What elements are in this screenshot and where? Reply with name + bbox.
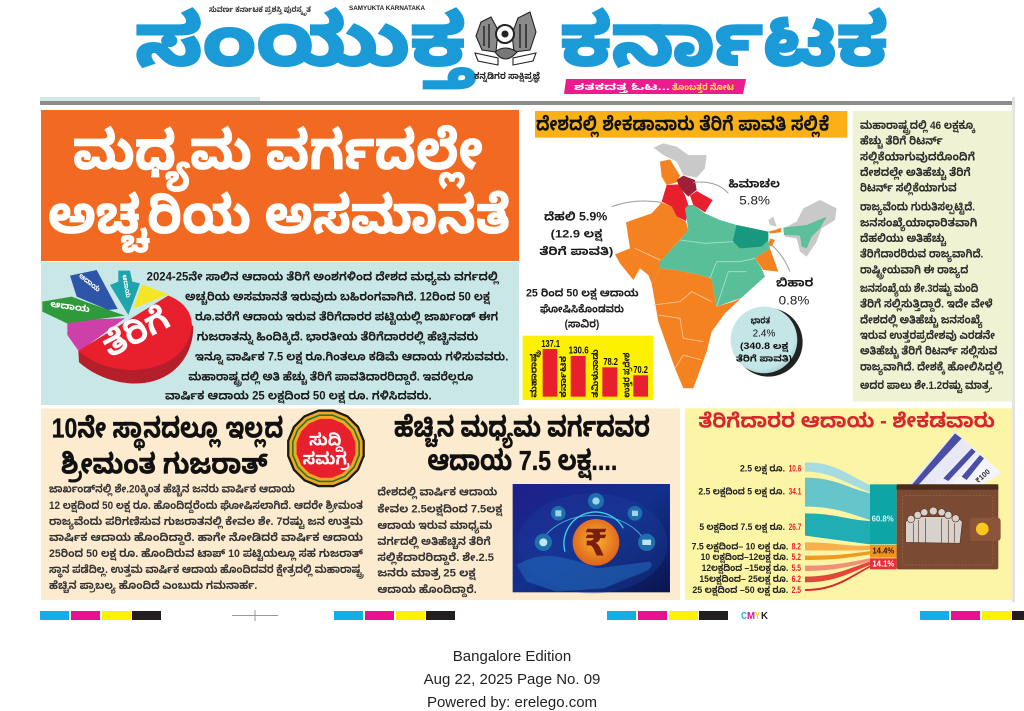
panel: taxpayer income percentages <box>685 408 1012 600</box>
registration colour bars <box>40 610 1024 622</box>
panel: Maharashtra text: ದೇಶದಲ್ಲಿ ಅತಿಹೆಚ್ಚು ಜನಸಂಖ್ಯೆ <box>860 313 983 328</box>
image: rupee coin on hand <box>513 484 670 593</box>
callout: India circle: (340.8 ಲಕ್ಷ <box>740 341 789 353</box>
badge: Suddi Samagra: ಸುದ್ದಿ <box>309 430 344 453</box>
panel: intro <box>41 262 519 405</box>
callout: Bihar: ಬಿಹಾರ <box>776 277 813 290</box>
income labels: 5 ಲಕ್ಷದಿಂದ 7.5 ಲಕ್ಷ ರೂ. <box>699 522 785 534</box>
sankey flows <box>805 462 897 591</box>
intro text: ರೂ.ವರೆಗೆ ಆದಾಯ ಇರುವ ತೆರಿಗೆದಾರರ ಪಟ್ಟಿಯಲ್ಲಿ ಜಾರ್ಖಂಡ್ ಈಗ <box>195 311 498 326</box>
bar chart: ತಮಿಳುನಾಡು <box>590 349 600 398</box>
pink tag: ತೊಂಬತ್ತರ ನೋಟ <box>672 82 734 93</box>
callout: Delhi <box>539 201 662 258</box>
Gujarat body text: ರಾಜ್ಯವೆಂದು ಪರಿಗಣಿಸುವ ಗುಜರಾತನಲ್ಲಿ ಕೇವಲ ಶೇ. 7ರಷ್ಟು ಜನ ಉತ್ತಮ <box>49 516 363 530</box>
story body text: ವರ್ಗದಲ್ಲಿ ಅತಿಹೆಚ್ಚಿನ ತೆರಿಗೆ <box>377 536 491 550</box>
bar chart caption: 25 ರಿಂದ 50 ಲಕ್ಷ ಆದಾಯ <box>526 288 639 301</box>
Gujarat heading <box>52 413 283 482</box>
panel: tax filing map <box>523 111 847 400</box>
icon: wallet with banknotes: ₹100 <box>974 467 992 485</box>
story body text: ಆದಾಯ ಹೊಂದಿದ್ದಾರೆ. <box>377 584 477 598</box>
income labels: 2.5 ಲಕ್ಷದಿಂದ 5 ಲಕ್ಷ ರೂ. <box>698 486 785 498</box>
income labels: 34.1 <box>789 486 801 496</box>
masthead title left: ಸಂಯುಕ್ತ <box>135 1 476 89</box>
story body text: ಕೇವಲ 2.5ಲಕ್ಷದಿಂದ 7.5ಲಕ್ಷ <box>377 503 502 517</box>
map of India <box>615 143 837 388</box>
panel: Maharashtra text: ಜನಸಂಖ್ಯೆಯ ಶೇ.3ರಷ್ಟು ಮಂದಿ <box>860 282 978 297</box>
masthead title right: ಕರ್ನಾಟಕ <box>560 1 888 81</box>
story body text: ದೇಶದಲ್ಲಿ ವಾರ್ಷಿಕ ಆದಾಯ <box>377 486 497 500</box>
sankey flows: 14.1% <box>872 558 895 568</box>
footer text: Aug 22, 2025 Page No. 09 <box>424 671 600 688</box>
callout: Himachal <box>693 178 780 207</box>
Gujarat body text: ವಾರ್ಷಿಕ ಆದಾಯ ಹೊಂದಿದ್ದಾರೆ. ಹಾಗೇ ನೋಡಿದರೆ ವಾರ್ಷಿಕ ಆದಾಯ <box>49 532 363 546</box>
income labels <box>692 463 801 597</box>
bar chart: 137.1 <box>541 339 560 350</box>
story body text: ಜನರು ಮಾತ್ರ 25 ಲಕ್ಷ <box>377 568 476 582</box>
bar chart: ಕರ್ನಾಟಕ <box>558 355 568 398</box>
panel: Maharashtra text: ದೆಹಲಿಯು ಅತಿಹೆಚ್ಚು <box>860 232 947 247</box>
panel: Maharashtra text: ಮಹಾರಾಷ್ಟ್ರದಲ್ಲಿ 46 ಲಕ್ಷಕ್ಕೂ <box>860 120 976 135</box>
footer text <box>424 648 600 711</box>
registration colour bars: C <box>741 611 747 622</box>
panel: Maharashtra text: ರಾಜ್ಯವಾಗಿದೆ. ದೇಶಕ್ಕೆ ಹೋಲಿಸಿದ್ದಲ್ಲಿ <box>860 360 1004 375</box>
story heading: ಹೆಚ್ಚಿನ ಮಧ್ಯಮ ವರ್ಗದವರ <box>394 412 650 449</box>
bar chart: 78.2 <box>603 357 618 368</box>
income heading: ತೆರಿಗೆದಾರರ ಆದಾಯ - ಶೇಕಡವಾರು <box>698 411 995 433</box>
headline line 2: ಅಚ್ಚರಿಯ ಅಸಮಾನತೆ <box>48 187 510 253</box>
callout: Delhi: ತೆರಿಗೆ ಪಾವತಿ) <box>539 245 614 258</box>
income labels: 12ಲಕ್ಷದಿಂದ –15ಲಕ್ಷ ರೂ. <box>702 563 788 575</box>
image: rupee coin on hand: ₹ <box>584 522 608 565</box>
icon: tax pie chart: ತೆರಿಗೆ <box>97 300 176 365</box>
intro text: ಗುಜರಾತನ್ನು ಹಿಂದಿಕ್ಕಿದೆ. ಭಾರತೀಯ ತೆರಿಗೆದಾರರಲ್ಲಿ ಹೆಚ್ಚಿನವರು <box>197 331 478 346</box>
income labels: 25 ಲಕ್ಷದಿಂದ –50 ಲಕ್ಷ ರೂ. <box>692 585 788 597</box>
panel: Maharashtra text: ಜನಸಂಖ್ಯೆಯಾಧಾರಿತವಾಗಿ <box>860 216 977 231</box>
icon: tax pie chart: ಆದಾಯ <box>77 271 102 294</box>
panel: Gujarat story <box>41 408 375 600</box>
masthead english name: SAMYUKTA KARNATAKA <box>349 6 426 12</box>
income labels: 6.2 <box>792 574 801 584</box>
panel: Maharashtra text: ರಾಜ್ಯವೆಂದು ಗುರುತಿಸಲ್ಪಟ್ಟಿದೆ. <box>860 201 975 216</box>
story body text <box>377 486 502 598</box>
callout: Bihar <box>772 245 813 307</box>
callout: Delhi: ದೆಹಲಿ 5.9% <box>544 211 608 224</box>
intro text: 2024-25ನೇ ಸಾಲಿನ ಆದಾಯ ತೆರಿಗೆ ಅಂಶಗಳಿಂದ ದೇಶದ ಮಧ್ಯಮ ವರ್ಗದಲ್ಲಿ <box>147 271 500 286</box>
Gujarat heading: 10ನೇ ಸ್ಥಾನದಲ್ಲೂ ಇಲ್ಲದ <box>52 413 283 451</box>
income labels: 8.2 <box>792 541 801 551</box>
panel: Maharashtra text: ರಿಟರ್ನ್ ಸಲ್ಲಿಕೆಯಾಗುವ <box>860 182 957 197</box>
footer text: Bangalore Edition <box>453 648 571 665</box>
sankey flows: 14.4% <box>872 545 895 555</box>
panel: Maharashtra text: ಹೆಚ್ಚು ತೆರಿಗೆ ರಿಟರ್ನ್ <box>860 135 943 150</box>
income labels: 26.7 <box>789 522 801 532</box>
panel: main headline <box>41 110 519 261</box>
bar chart: ಉತ್ತರ ಪ್ರದೇಶ <box>621 353 632 398</box>
icon: emblem <box>475 12 536 65</box>
bar chart: 70.2 <box>633 365 648 376</box>
pink tag: ಶತಕದತ್ತ ಓಟ... <box>574 82 670 93</box>
income labels: 7.5 ಲಕ್ಷದಿಂದ– 10 ಲಕ್ಷ ರೂ. <box>692 541 788 553</box>
masthead <box>135 1 888 94</box>
bar chart caption <box>526 288 639 331</box>
Gujarat body text <box>49 483 364 594</box>
icon: wallet with banknotes <box>897 432 1002 569</box>
Gujarat body text: 12 ಲಕ್ಷದಿಂದ 50 ಲಕ್ಷ ರೂ. ಹೊಂದಿದ್ದರೆಂದು ಘೋಷಿಸಲಾಗಿದೆ. ಆದರೇ ಶ್ರೀಮಂತ <box>49 500 363 514</box>
income labels: 2.5 <box>792 585 801 595</box>
story body text: ಸಲ್ಲಿಕೆದಾರರಿದ್ದಾರೆ. ಶೇ.2.5 <box>377 552 494 566</box>
Gujarat body text: 25ರಿಂದ 50 ಲಕ್ಷ ರೂ. ಹೊಂದಿರುವ ಟಾಪ್ 10 ಪಟ್ಟಿಯಲ್ಲೂ ಸಹ ಗುಜರಾತ್ <box>49 548 363 562</box>
panel: Maharashtra text: ತೆರಿಗೆದಾರರಿರುವ ರಾಜ್ಯವಾಗಿದೆ. <box>860 248 983 263</box>
bar chart: 130.6 <box>569 346 589 357</box>
intro text: ಇನ್ನೂ ವಾರ್ಷಿಕ 7.5 ಲಕ್ಷ ರೂ.ಗಿಂತಲೂ ಕಡಿಮೆ ಆದಾಯ ಗಳಿಸುವವರು. <box>195 351 508 366</box>
Gujarat body text: ಸ್ಥಾನ ಪಡೆದಿಲ್ಲ. ಉತ್ತಮ ವಾರ್ಷಿಕ ಆದಾಯ ಹೊಂದಿದವರ ಕ್ಷೇತ್ರದಲ್ಲಿ ಮಹಾರಾಷ್ಟ್ರ <box>49 564 364 579</box>
registration colour bars: K <box>761 611 769 622</box>
callout: India circle: ಭಾರತ <box>751 315 770 325</box>
income labels: 2.5 ಲಕ್ಷ ರೂ. <box>740 463 785 475</box>
story body text: ಆದಾಯ ಇರುವ ಮಾಧ್ಯಮ <box>377 520 493 534</box>
callout: Bihar: 0.8% <box>779 294 809 307</box>
bar chart caption: (ಸಾವಿರ) <box>565 319 600 331</box>
panel: Maharashtra text: ಅತಿಹೆಚ್ಚು ತೆರಿಗೆ ರಿಟರ್ನ್ ಸಲ್ಲಿಸುವ <box>860 345 998 360</box>
bar chart <box>523 336 653 400</box>
intro text <box>147 271 508 405</box>
masthead tagline: ಸುವರ್ಣ ಕರ್ನಾಟಕ ಪ್ರಶಸ್ತಿ ಪುರಸ್ಕೃತ <box>209 5 311 16</box>
page rule <box>40 97 1015 602</box>
badge: Suddi Samagra <box>287 409 365 487</box>
story heading <box>394 412 650 481</box>
headline line 1: ಮಧ್ಯಮ ವರ್ಗದಲ್ಲೇ <box>73 121 483 192</box>
panel: middle class income story <box>370 408 680 600</box>
bar chart: ಮಹಾರಾಷ್ಟ್ರ <box>529 350 542 398</box>
intro text: ವಾರ್ಷಿಕ ಆದಾಯ 25 ಲಕ್ಷದಿಂದ 50 ಲಕ್ಷ ರೂ. ಗಳಿಸಿದವರು. <box>165 390 432 405</box>
intro text: ಮಹಾರಾಷ್ಟ್ರದಲ್ಲಿ ಅತಿ ಹೆಚ್ಚು ತೆರಿಗೆ ಪಾವತಿದಾರರಿದ್ದಾರೆ. ಇವರೆಲ್ಲರೂ <box>188 371 474 388</box>
panel: Maharashtra text: ಅದರ ಪಾಲು ಶೇ.1.2ರಷ್ಟು ಮಾತ್ರ. <box>860 379 993 394</box>
income labels: 15ಲಕ್ಷದಿಂದ– 25ಲಕ್ಷ ರೂ. <box>699 574 788 586</box>
story heading: ಆದಾಯ 7.5 ಲಕ್ಷ.... <box>427 445 617 481</box>
icon: tax pie chart: ಆದಾಯ <box>50 299 91 314</box>
badge: Suddi Samagra: ಸಮಗ್ರ <box>303 448 350 470</box>
callout: Himachal: ಹಿಮಾಚಲ <box>728 178 780 191</box>
panel: Maharashtra text: ದೇಶದಲ್ಲೇ ಅತಿಹೆಚ್ಚು ತೆರಿಗೆ <box>860 166 971 181</box>
callout: India circle: 2.4% <box>753 328 776 339</box>
footer text: Powered by: erelego.com <box>427 694 597 711</box>
map heading: ದೇಶದಲ್ಲಿ ಶೇಕಡಾವಾರು ತೆರಿಗೆ ಪಾವತಿ ಸಲ್ಲಿಕೆ <box>536 114 829 138</box>
icon: tax pie chart <box>42 270 193 384</box>
panel: Maharashtra text: ತೆರಿಗೆ ಸಲ್ಲಿಸುತ್ತಿದ್ದಾರೆ. ಇದೇ ವೇಳೆ <box>860 298 993 313</box>
bar chart caption: ಘೋಷಿಸಿಕೊಂಡವರು <box>540 303 624 315</box>
income labels: 5.2 <box>792 552 801 562</box>
income labels: 10.6 <box>789 463 801 473</box>
registration colour bars: M <box>747 611 755 622</box>
Gujarat body text: ಹೆಚ್ಚಿನ ಪ್ರಾಬಲ್ಯ ಹೊಂದಿದೆ ಎಂಬುದು ಗಮನಾರ್ಹ. <box>49 580 257 594</box>
panel: Maharashtra text: ರಾಷ್ಟ್ರೀಯವಾಗಿ ಈ ರಾಜ್ಯದ <box>860 264 968 279</box>
icon: tax pie chart: ಆದಾಯ <box>120 274 132 298</box>
callout: Himachal: 5.8% <box>739 194 770 207</box>
emblem caption: ಕನ್ನಡಿಗರ ಸಾಕ್ಷಿಪ್ರಜ್ಞೆ <box>474 71 540 83</box>
callout: Delhi: (12.9 ಲಕ್ಷ <box>551 229 603 243</box>
panel: Maharashtra text: ಇರುವ ಉತ್ತರಪ್ರದೇಶವು ಎರಡನೇ <box>860 329 995 343</box>
panel: Maharashtra text: ಸಲ್ಲಿಕೆಯಾಗುವುದರೊಂದಿಗೆ <box>860 150 975 165</box>
sankey flows: 60.8% <box>872 514 894 524</box>
callout: India circle: ತೆರಿಗೆ ಪಾವತಿ) <box>736 354 792 364</box>
pink tag <box>564 79 746 94</box>
panel: Maharashtra text <box>853 111 1013 402</box>
Gujarat body text: ಜಾರ್ಖಂಡ್‌ನಲ್ಲಿ ಶೇ.20ಕ್ಕಿಂತ ಹೆಚ್ಚಿನ ಜನರು ವಾರ್ಷಿಕ ಆದಾಯ <box>49 483 295 497</box>
intro text: ಅಚ್ಚರಿಯ ಅಸಮಾನತೆ ಇರುವುದು ಬಹಿರಂಗವಾಗಿದೆ. 12ರಿಂದ 50 ಲಕ್ಷ <box>185 291 490 306</box>
income labels: 5.5 <box>792 563 801 573</box>
callout: India circle <box>731 307 803 377</box>
registration colour bars: Y <box>755 611 760 622</box>
Gujarat heading: ಶ್ರೀಮಂತ ಗುಜರಾತ್ <box>61 448 268 482</box>
income labels: 10 ಲಕ್ಷದಿಂದ–12ಲಕ್ಷ ರೂ. <box>701 552 788 564</box>
